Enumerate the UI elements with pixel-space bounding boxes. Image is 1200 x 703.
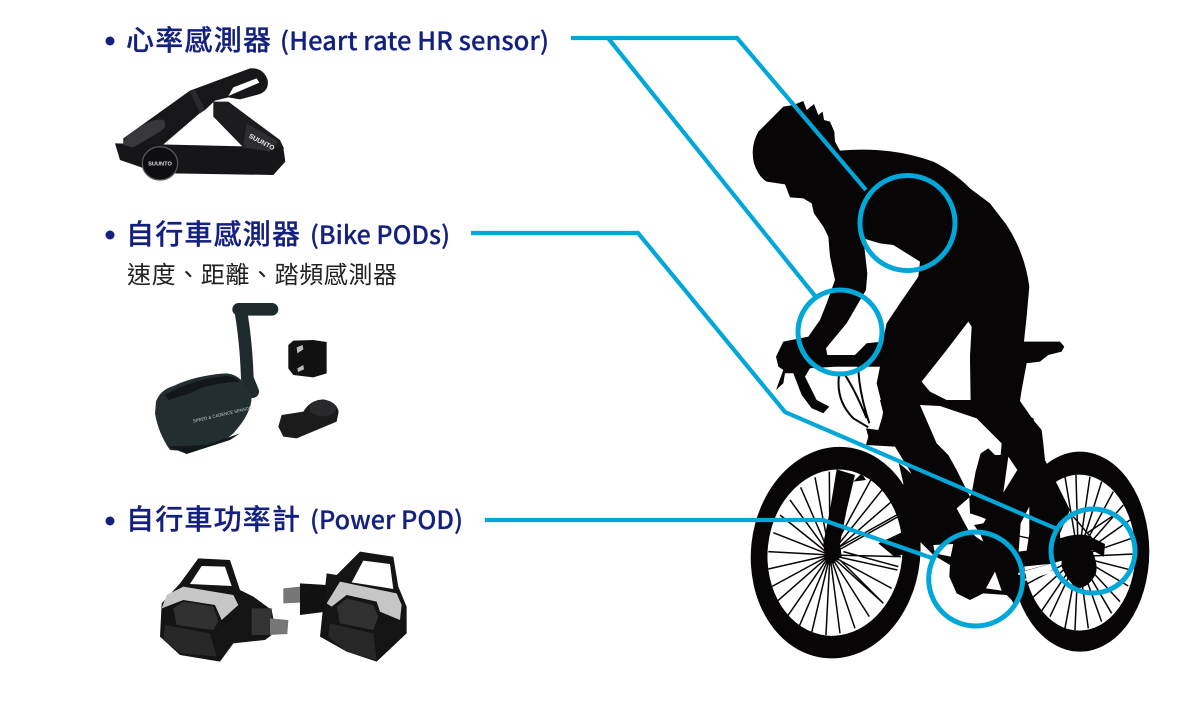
leader line: bike PODs	[471, 233, 1057, 529]
circle: chest sensor location	[860, 176, 955, 270]
heading: power meter: (Power POD)	[310, 501, 463, 537]
product photo: chest strap	[115, 68, 285, 180]
brake cables	[838, 365, 869, 427]
right pedal	[283, 552, 407, 662]
leader lines: heart rate sensor	[571, 38, 866, 296]
product photo: chest strap: SUUNTO	[148, 161, 172, 167]
product photo: power pedals	[160, 552, 407, 662]
leader line: power POD	[485, 520, 932, 558]
white gap under hip	[922, 322, 972, 403]
heading: heart rate sensor: 心率感測器	[126, 24, 271, 56]
frame, legs and drivetrain	[866, 400, 1070, 608]
front wheel	[740, 438, 931, 667]
heading: power meter	[106, 501, 463, 537]
heading: power meter: 自行車功率計	[126, 504, 300, 535]
heading: bike PODs: 自行車感測器	[126, 218, 300, 250]
rider upper body	[753, 101, 1064, 457]
cyclist silhouette with bicycle	[740, 101, 1149, 667]
rear wheel	[1011, 452, 1149, 652]
heading: bike PODs	[106, 216, 450, 252]
heading: heart rate sensor: (Heart rate HR sensor)	[280, 22, 549, 58]
product photo: speed and cadence sensor	[155, 309, 339, 454]
spoke magnet	[288, 340, 327, 377]
subheading: speed, distance, cadence sensors: 速度、距離、踏頻感測器	[127, 262, 397, 289]
product photo: chest strap: SUUNTO	[247, 133, 275, 152]
sensor arm	[239, 309, 272, 392]
circle: crank location	[929, 532, 1023, 626]
product photo: speed and cadence sensor: SPEED & CADENCE SENSOR	[192, 405, 253, 424]
crank sensor	[278, 399, 339, 438]
circle: handlebar location	[798, 290, 882, 374]
left pedal	[160, 558, 288, 662]
white gap between arm and torso	[826, 238, 920, 355]
heading: bike PODs: (Bike PODs)	[310, 216, 450, 252]
sensor body	[155, 373, 252, 450]
heading: heart rate sensor	[106, 22, 549, 58]
circle: rear hub location	[1051, 509, 1135, 593]
